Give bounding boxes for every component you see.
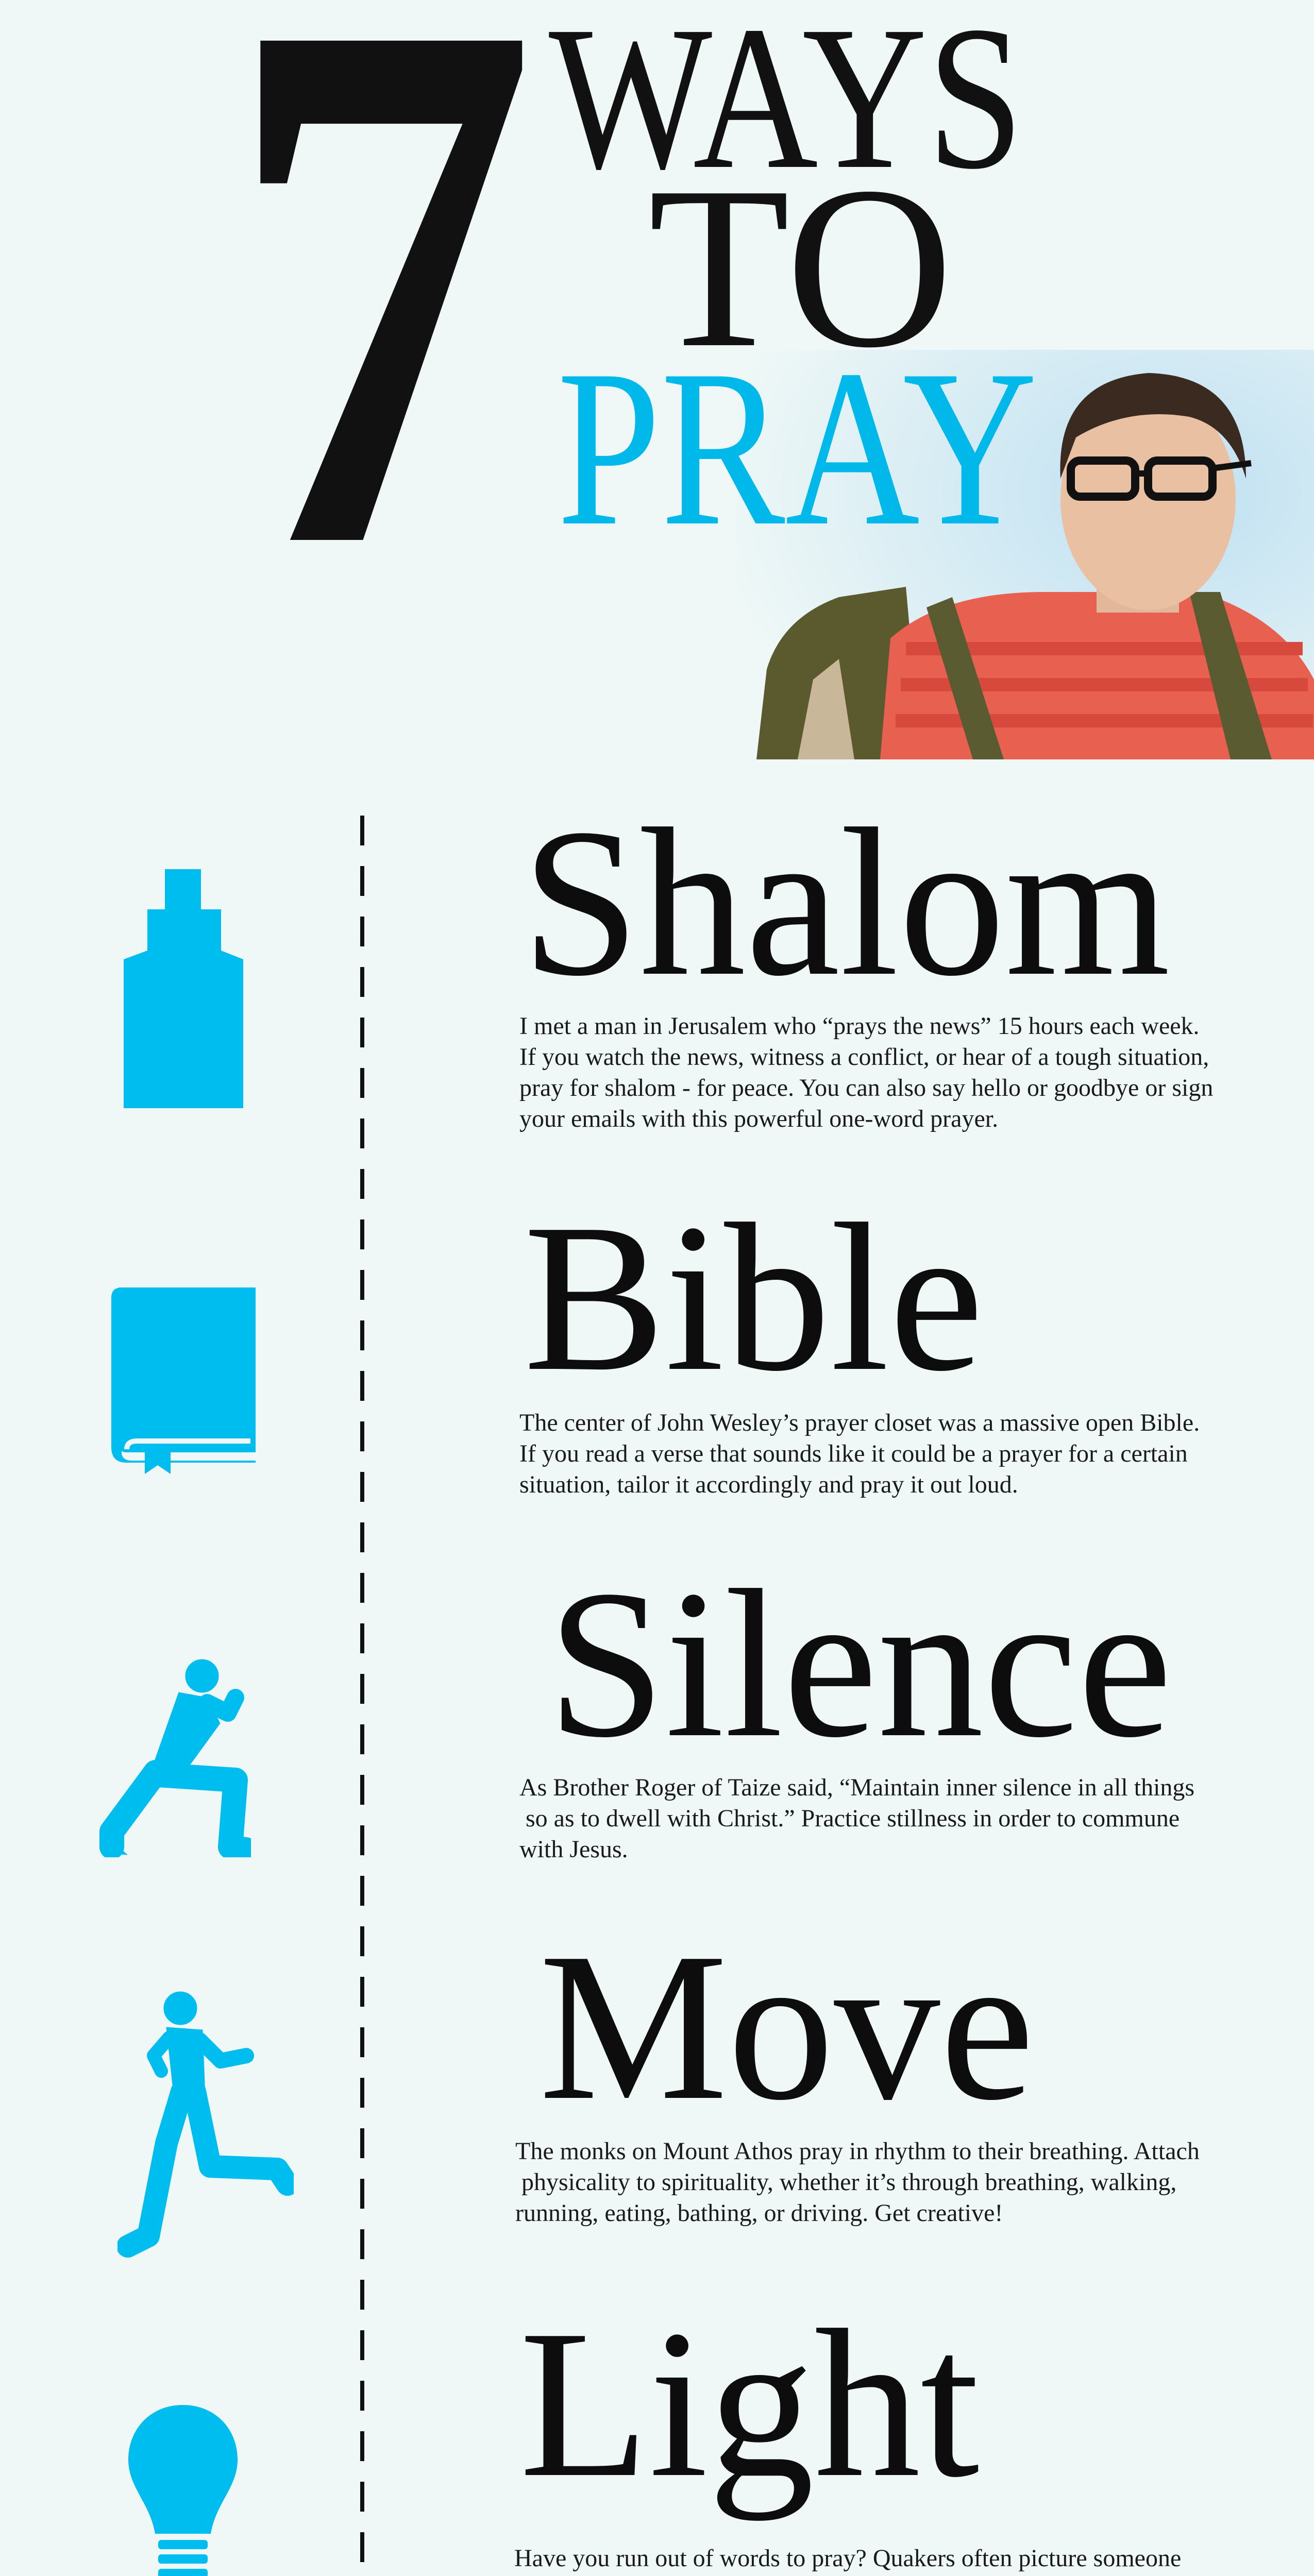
text: Silence body: so as to dwell with Christ.” Practice stillness in order to commune bbox=[526, 1805, 1180, 1832]
photo: man with backpack bbox=[756, 350, 1314, 759]
section: Move bbox=[117, 1909, 1200, 2258]
text: Bible body: If you read a verse that sounds like it could be a prayer for a certain bbox=[519, 1440, 1188, 1467]
heading: Shalom: Shalom bbox=[521, 785, 1170, 1020]
text: Silence body: with Jesus. bbox=[519, 1836, 628, 1863]
text: Move body bbox=[515, 2138, 1200, 2227]
heading: Move: Move bbox=[539, 1909, 1034, 2144]
icon: light bulb bbox=[128, 2405, 238, 2576]
icon: book bbox=[111, 1287, 256, 1474]
text: Shalom body: your emails with this powerful one-word prayer. bbox=[519, 1105, 998, 1132]
text: Shalom body bbox=[519, 1012, 1213, 1132]
icon: bottle bbox=[124, 869, 243, 1108]
text: Silence body: As Brother Roger of Taize said, “Maintain inner silence in all things bbox=[519, 1774, 1194, 1801]
section: Shalom bbox=[124, 785, 1213, 1132]
heading: Silence: Silence bbox=[547, 1547, 1172, 1782]
dashed timeline line bbox=[360, 816, 364, 2562]
section: Light bbox=[128, 2286, 1193, 2576]
text: Shalom body: pray for shalom - for peace. You can also say hello or goodbye or sign bbox=[519, 1074, 1213, 1101]
text: Bible body: situation, tailor it accordingly and pray it out loud. bbox=[519, 1471, 1018, 1498]
icon: runner bbox=[117, 1992, 294, 2258]
text: Shalom body: I met a man in Jerusalem who “prays the news” 15 hours each week. bbox=[519, 1012, 1200, 1040]
icon: kneeling man bbox=[99, 1659, 251, 1857]
text: Move body: The monks on Mount Athos pray in rhythm to their breathing. Attach bbox=[515, 2138, 1200, 2165]
heading: Light: Light bbox=[519, 2286, 980, 2521]
section: Bible bbox=[111, 1180, 1200, 1498]
heading: Bible: Bible bbox=[524, 1180, 984, 1415]
title: TO: TO bbox=[648, 139, 953, 396]
text: Light body: Have you run out of words to pray? Quakers often picture someone bbox=[514, 2545, 1181, 2572]
text: Move body: physicality to spirituality, whether it’s through breathing, walking, bbox=[521, 2168, 1176, 2196]
text: Shalom body: If you watch the news, witness a conflict, or hear of a tough situation, bbox=[519, 1043, 1209, 1071]
text: Silence body bbox=[519, 1774, 1194, 1863]
title: PRAY: PRAY bbox=[557, 324, 1037, 572]
text: Bible body bbox=[519, 1409, 1200, 1498]
text: Bible body: The center of John Wesley’s prayer closet was a massive open Bible. bbox=[519, 1409, 1200, 1436]
section: Silence bbox=[99, 1547, 1194, 1863]
text: Move body: running, eating, bathing, or driving. Get creative! bbox=[515, 2199, 1003, 2227]
